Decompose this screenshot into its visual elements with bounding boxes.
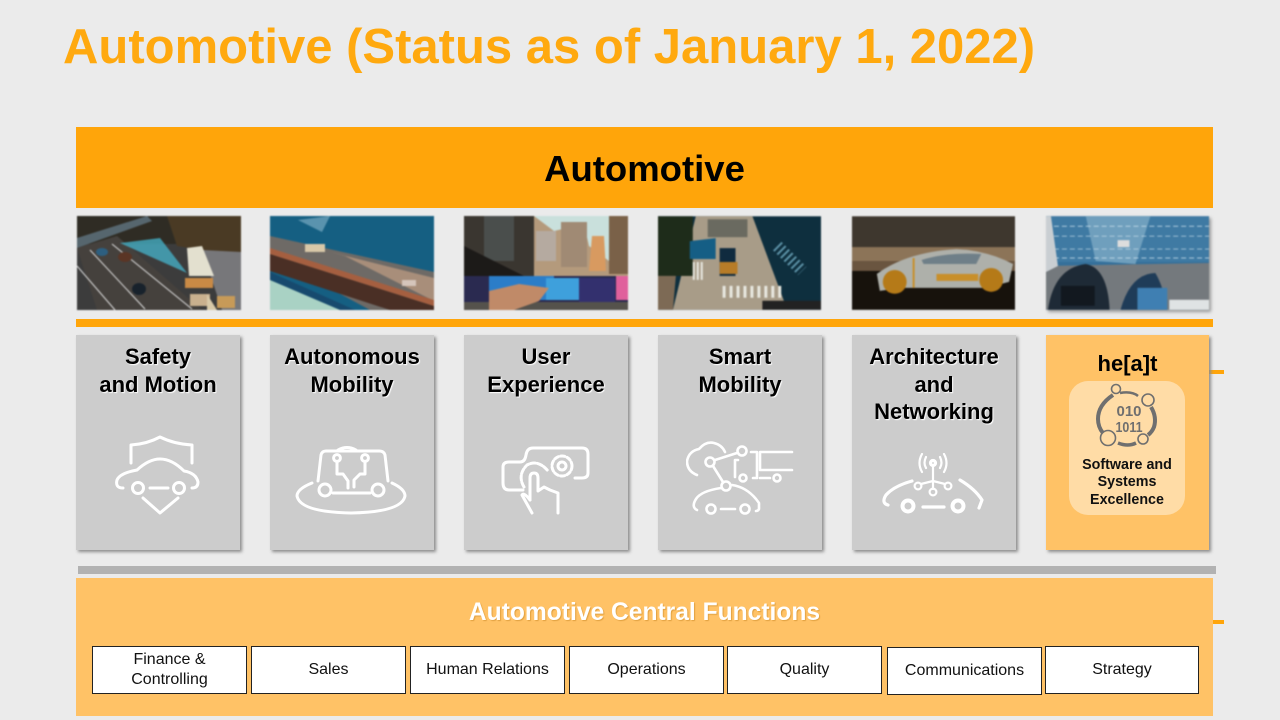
title: Automotive (Status as of January 1, 2022) <box>63 20 1035 74</box>
function box: Human Relations <box>410 646 565 694</box>
panel: Architecture and Networking <box>852 335 1016 550</box>
function box: Quality <box>727 646 882 694</box>
photo: hand on dashboard display with city view <box>463 215 629 311</box>
heading <box>698 344 782 398</box>
panel: he[a]t software and systems <box>1046 335 1209 550</box>
heading: Automotive Central Functions <box>469 599 820 626</box>
heading: and <box>914 372 954 396</box>
heading: Mobility <box>310 372 394 396</box>
heading: and Motion <box>99 372 217 396</box>
binary digits: 010 <box>1116 403 1142 420</box>
function box: Communications <box>887 647 1042 695</box>
function box: Finance & Controlling: Finance & <box>133 651 206 668</box>
inner card: Software and Systems Excellence <box>1069 381 1185 515</box>
heading <box>487 344 606 398</box>
function box: Human Relations: Human Relations <box>426 661 549 678</box>
icon: hand touching gears <box>502 446 590 514</box>
icon: cloud, truck and connected car <box>686 441 794 515</box>
header band: Automotive <box>76 127 1213 208</box>
heading <box>99 344 217 396</box>
function box: Communications: Communications <box>905 662 1024 679</box>
heading: Safety <box>125 344 191 369</box>
function box: Strategy: Strategy <box>1092 661 1152 678</box>
function box: Quality: Quality <box>780 661 829 678</box>
heading: Mobility <box>698 372 782 396</box>
caption: Software and <box>1082 457 1172 473</box>
caption <box>1082 457 1172 508</box>
panel: Autonomous Mobility <box>270 335 434 550</box>
photo: aerial view of intersection <box>657 215 822 311</box>
caption: Systems <box>1098 474 1156 490</box>
heading: he[a]t: he[a]t <box>1098 351 1157 376</box>
heading: Autonomous <box>284 344 420 369</box>
heading <box>869 344 1000 425</box>
function box: Operations: Operations <box>607 661 686 678</box>
photo: silver car with glowing systems <box>850 215 1016 311</box>
accent tick: software panel <box>1209 370 1224 374</box>
icon: binary code in ring of nodes: 1011 <box>1116 419 1142 436</box>
photo: digital data through windshield <box>1046 216 1209 310</box>
caption: Excellence <box>1090 492 1164 508</box>
heading: Experience <box>487 372 605 396</box>
heading <box>284 344 420 398</box>
icon: autonomous shuttle on platform <box>296 446 406 514</box>
function box: Sales: Sales <box>308 661 349 678</box>
gray divider bar <box>78 566 1216 574</box>
function box: Operations <box>569 646 724 694</box>
accent tick: central functions <box>1213 620 1224 624</box>
icon: connected car with antenna <box>882 453 984 514</box>
function box: Strategy <box>1045 646 1199 694</box>
photo: bridge over water <box>269 215 435 311</box>
panel: Smart Mobility <box>658 335 822 550</box>
orange divider bar <box>76 319 1213 327</box>
function box: Finance & Controlling: Controlling <box>131 671 208 688</box>
heading: Smart <box>709 344 771 369</box>
icon: car with shield <box>115 436 200 514</box>
photo: road with sensor beam <box>76 215 242 311</box>
heading: User <box>522 344 570 369</box>
header band: Automotive: Automotive <box>544 148 745 189</box>
panel: Safety and Motion <box>76 335 240 550</box>
function box: Finance & Controlling <box>92 646 247 694</box>
panel: User Experience <box>464 335 628 550</box>
panel: Automotive Central Functions <box>76 578 1213 716</box>
function box: Sales <box>251 646 406 694</box>
heading: Architecture <box>869 344 999 369</box>
heading: Networking <box>874 399 994 424</box>
icon: binary code in ring of nodes <box>1096 384 1157 447</box>
